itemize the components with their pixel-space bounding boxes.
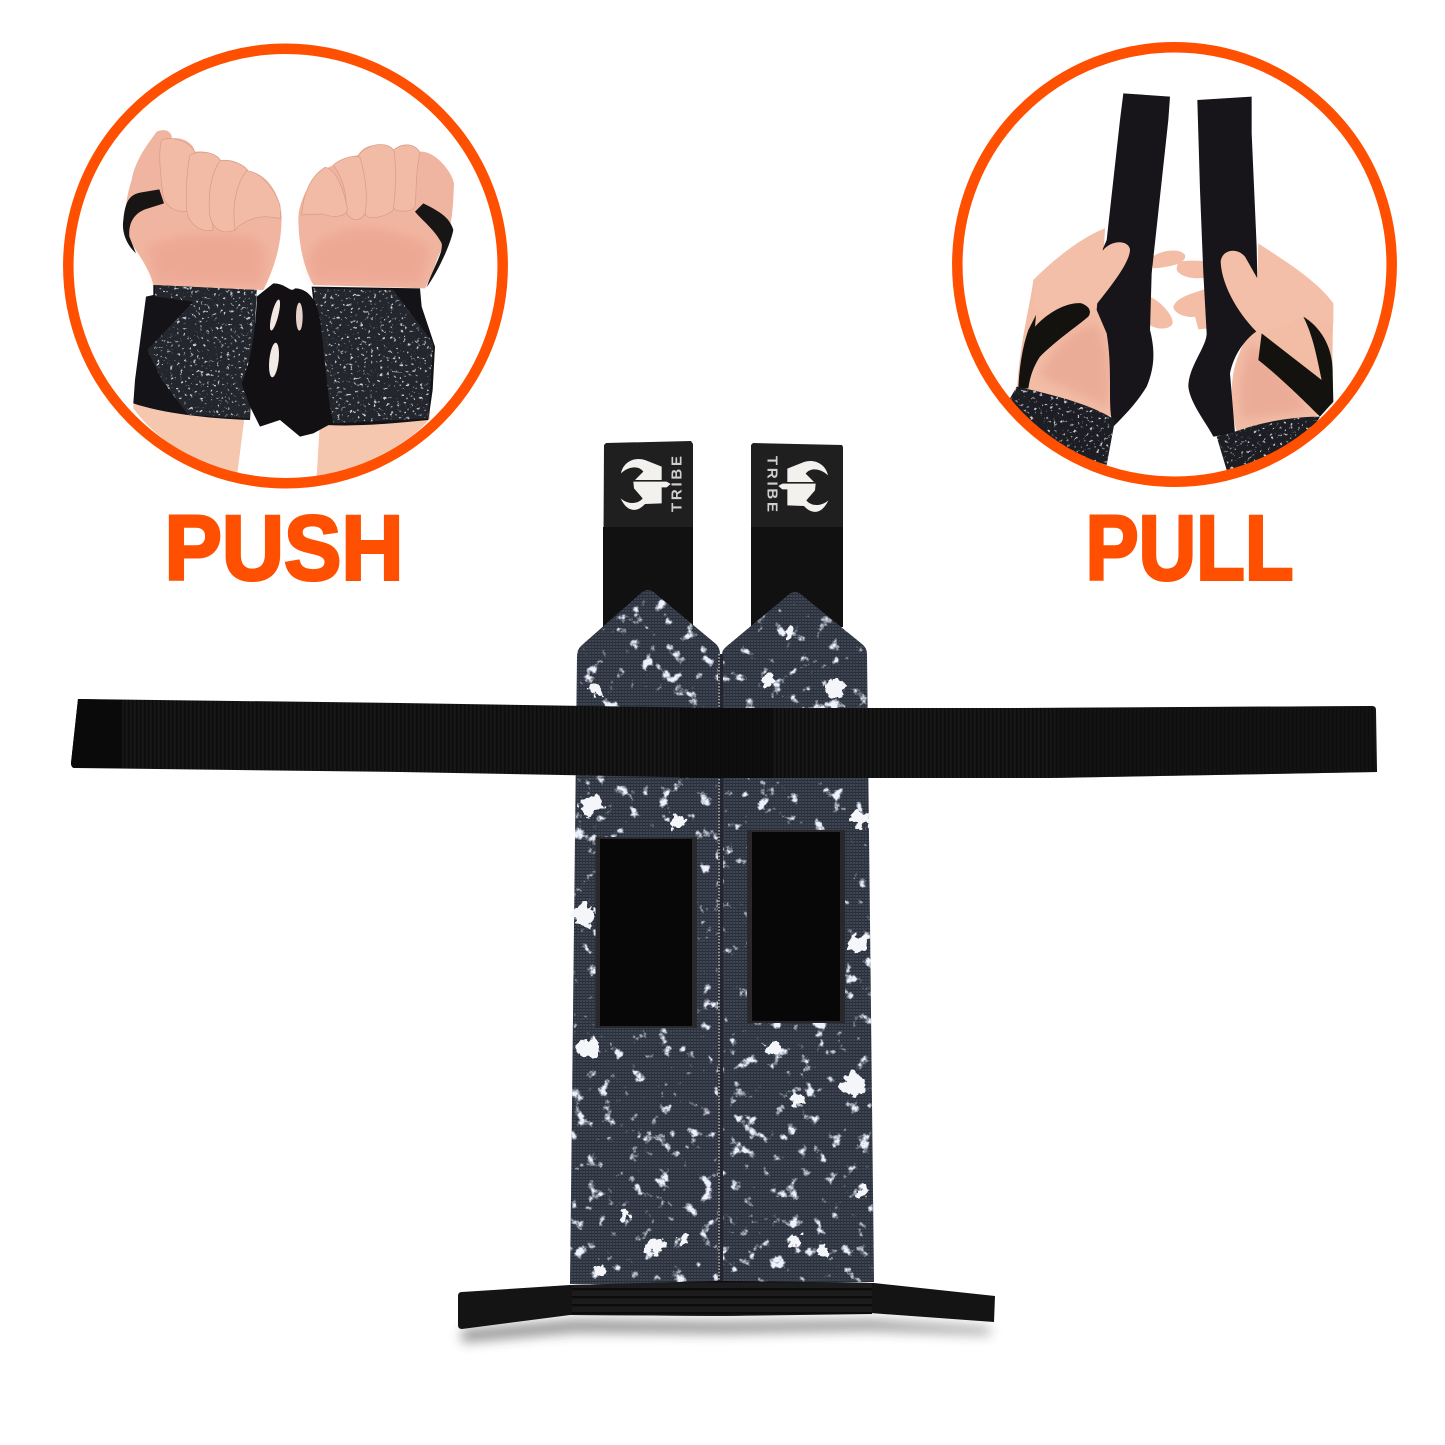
pull hands and straps illustration <box>1010 93 1333 470</box>
panel: pull photo <box>957 47 1392 482</box>
back fingers <box>1150 250 1208 329</box>
right wrap fabric <box>722 592 874 1284</box>
left wrap cuff <box>1010 387 1115 465</box>
left wrap <box>133 285 257 420</box>
right palm shading <box>309 228 430 283</box>
product: wrist wraps <box>71 441 1377 1342</box>
heading: pull: PULL <box>1086 498 1294 600</box>
fabric white clusters <box>573 627 870 1278</box>
bottom elastic strap <box>458 1281 995 1329</box>
thumb strap left <box>123 189 164 253</box>
right fist <box>298 145 454 288</box>
long horizontal strap <box>71 699 1377 778</box>
left palm shadow <box>1040 323 1109 407</box>
logo: bull mark right <box>778 461 828 512</box>
left hand and thumb <box>1033 228 1130 317</box>
right wrap <box>312 287 435 425</box>
left logo tab <box>603 441 693 627</box>
wrap seam <box>719 654 720 1284</box>
left strap <box>1097 93 1170 427</box>
right wrap cuff <box>1217 417 1320 470</box>
right velcro patch <box>747 830 845 1023</box>
right wrap marble <box>313 288 433 423</box>
push ring <box>68 49 503 483</box>
forearm right <box>317 410 430 477</box>
right hand and thumb <box>1221 243 1333 335</box>
left thumb band <box>1018 303 1090 388</box>
left velcro patch <box>596 837 697 1028</box>
forearm left <box>133 398 245 473</box>
logo: bull mark left <box>621 459 671 510</box>
left palm <box>1017 228 1114 417</box>
bottom shadow <box>462 1320 990 1342</box>
right thumb band <box>1258 317 1333 417</box>
left fingers <box>160 139 281 232</box>
cord bundle <box>242 283 332 437</box>
thumb strap right <box>415 203 453 287</box>
left palm shading <box>147 234 265 285</box>
brand text right: TRIBE <box>764 456 780 512</box>
pull ring <box>957 47 1392 482</box>
push hands and wraps illustration <box>123 130 454 477</box>
panel: push photo <box>68 49 503 483</box>
right fingers <box>302 145 420 220</box>
heading: push: PUSH <box>164 498 404 600</box>
right palm <box>1232 273 1333 432</box>
right palm shadow <box>1240 343 1308 420</box>
brand text left: TRIBE <box>668 456 686 512</box>
left wrap fabric <box>570 590 721 1284</box>
left fist <box>125 130 282 290</box>
left wrap marble <box>147 285 257 418</box>
right logo tab <box>751 443 843 627</box>
right strap <box>1188 97 1258 437</box>
